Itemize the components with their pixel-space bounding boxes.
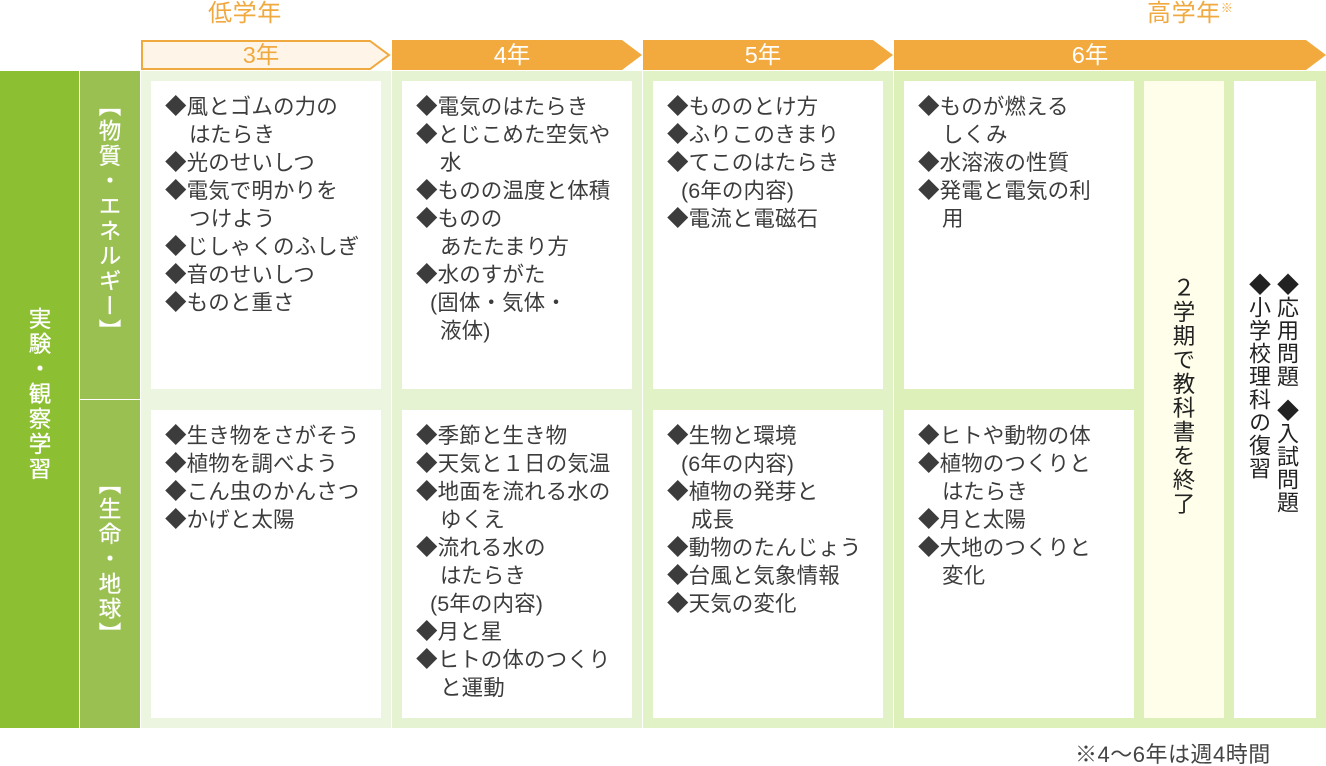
label: grade 4: 4年 [494, 42, 530, 68]
card: grade 5 life: ◆台風と気象情報 [667, 564, 840, 588]
card: grade 3 life: ◆植物を調べよう [165, 452, 338, 476]
card: grade 5 life: ◆天気の変化 [667, 592, 797, 616]
card: grade 6 matter [904, 81, 1134, 389]
card: grade 6 life: ◆植物のつくりと ◆月と太陽 [918, 452, 1091, 532]
heading: upper grades: 高学年※ [1147, 0, 1233, 27]
card: grade 5 life: (6年の内容) [681, 452, 794, 476]
card: grade 3 matter: ◆電気で明かりを ◆じしゃくのふしぎ [165, 179, 359, 259]
card: grade 6 life [904, 410, 1134, 718]
heading: lower grades: 低学年 [208, 0, 282, 27]
column: grade 3 [141, 71, 391, 728]
label: grade 3: 3年 [243, 42, 279, 68]
card: grade 5 matter: ◆ふりこのきまり [667, 123, 839, 147]
arrow: grade 5 [643, 40, 893, 70]
column: grade 5 [643, 71, 893, 728]
card: grade 3 life: ◆こん虫のかんさつ [165, 480, 359, 504]
card: grade 3 life: ◆生き物をさがそう [165, 424, 359, 448]
card: grade 4 matter [402, 81, 632, 389]
arrow: grade 3 [141, 40, 391, 70]
card: grade 6 life: 変化 [942, 564, 985, 588]
arrow: grade 6 [894, 40, 1326, 70]
card: grade 6 life: ◆大地のつくりと [918, 536, 1091, 560]
card: grade 6 life: はたらき [942, 480, 1028, 504]
panel: life and earth [80, 400, 140, 728]
card: grade 5 life: ◆生物と環境 ◆植物の発芽と ◆動物のたんじょう [667, 424, 861, 560]
text: textbook finished: ２学期で教科書を終了 [1170, 276, 1195, 516]
text: matter and energy: 【物質・エネルギー】 [96, 94, 121, 344]
card: grade 3 matter [151, 81, 381, 389]
card: grade 4 life: ◆地面を流れる水の ◆流れる水の ◆月と星 [416, 480, 610, 644]
panel: textbook finished [1144, 81, 1224, 718]
card: grade 4 life [402, 410, 632, 718]
card: grade 3 life: ◆かげと太陽 [165, 508, 295, 532]
card: grade 5 matter: ◆てこのはたらき ◆電流と電磁石 [667, 151, 839, 231]
card: grade 4 matter: (固体・気体・ [430, 291, 567, 315]
card: grade 3 matter: ◆音のせいしつ [165, 263, 315, 287]
column: grade 4 [392, 71, 642, 728]
card: grade 4 matter: ◆電気のはたらき [416, 95, 588, 119]
card: grade 5 matter [653, 81, 883, 389]
card: grade 5 life [653, 410, 883, 718]
card: grade 3 matter: ◆ものと重さ [165, 291, 295, 315]
arrow: grade 4 [392, 40, 642, 70]
card: grade 4 matter: 液体) [440, 319, 490, 343]
card: grade 4 life: (5年の内容) [430, 592, 543, 616]
card: grade 4 matter: あたたまり方 [440, 235, 569, 259]
card: grade 5 life: 成長 [691, 508, 734, 532]
card: grade 3 matter: ◆風とゴムの力の ◆光のせいしつ [165, 95, 338, 175]
card: grade 6 matter: ◆ものが燃える ◆水溶液の性質 [918, 95, 1069, 175]
text: experiment and observation: 実験・観察学習 [26, 307, 51, 482]
text: review [1246, 273, 1299, 514]
card: grade 3 matter: はたらき [189, 123, 275, 147]
card: grade 6 matter: しくみ [942, 123, 1008, 147]
label: grade 6: 6年 [1072, 42, 1108, 68]
card: grade 4 matter: ◆ものの ◆水のすがた [416, 207, 546, 287]
card: grade 4 life: と運動 [440, 676, 505, 700]
card: grade 6 matter: 用 [942, 207, 964, 231]
text: life and earth: 【生命・地球】 [96, 472, 121, 647]
panel: review [1234, 81, 1316, 718]
card: grade 4 matter: ◆とじこめた空気や ◆ものの温度と体積 [416, 123, 610, 203]
column: grade 6 [894, 71, 1326, 728]
card: grade 4 life: ◆ヒトの体のつくり [416, 648, 610, 672]
card: grade 5 matter: ◆もののとけ方 [667, 95, 818, 119]
card: grade 3 life [151, 410, 381, 718]
label: grade 5: 5年 [745, 42, 781, 68]
card: grade 4 life: ゆくえ [440, 508, 505, 532]
text: review: ◆小学校理科の復習 [1246, 273, 1271, 480]
card: grade 4 matter: 水 [440, 151, 462, 175]
card: grade 6 matter: ◆発電と電気の利 [918, 179, 1091, 203]
panel: matter and energy [80, 71, 140, 399]
card: grade 6 life: ◆ヒトや動物の体 [918, 424, 1091, 448]
card: grade 5 matter: (6年の内容) [681, 179, 794, 203]
card: grade 4 life: ◆季節と生き物 [416, 424, 567, 448]
card: grade 4 life: はたらき [440, 564, 526, 588]
panel: experiment and observation [0, 71, 79, 728]
text: review: ◆応用問題 ◆入試問題 [1274, 273, 1299, 514]
card: grade 4 life: ◆天気と１日の気温 [416, 452, 610, 476]
card: grade 3 matter: つけよう [189, 207, 275, 231]
